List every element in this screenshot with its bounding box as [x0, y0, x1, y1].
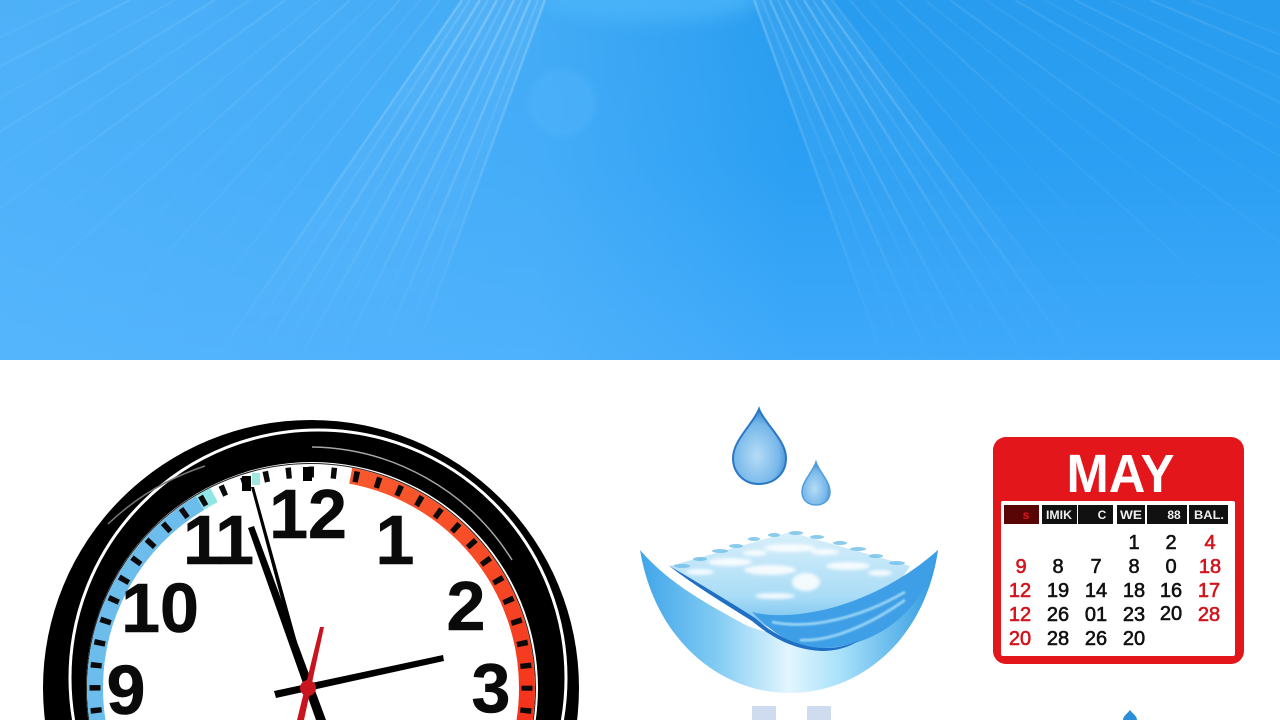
sky banner background [0, 0, 1280, 360]
date grid: 18 [1199, 556, 1221, 578]
clock numerals: 12 [269, 475, 347, 553]
clock numerals: 1 [376, 501, 414, 579]
water drop small [802, 462, 830, 505]
bowl body [640, 550, 938, 693]
deep water wave [752, 550, 938, 648]
weekday header: WE [1120, 508, 1142, 522]
clock numerals: 2 [447, 567, 485, 645]
weekday header: IMIK [1046, 508, 1072, 522]
date grid: 20 [1123, 628, 1145, 650]
clock [43, 420, 579, 720]
date grid: 14 [1085, 580, 1107, 602]
clock minute band [86, 464, 536, 720]
date grid: 9 [1015, 556, 1027, 578]
date grid: 20 [1009, 628, 1031, 650]
weekday header: s [1023, 508, 1030, 522]
month title: MAY [1066, 444, 1174, 504]
date grid: 26 [1047, 604, 1069, 626]
small bottom water drop [1123, 710, 1137, 720]
date grid: 12 [1009, 604, 1031, 626]
water surface [670, 532, 910, 640]
date grid: 0 [1165, 556, 1177, 578]
weekday header [1004, 505, 1228, 524]
weekday header: 88 [1167, 508, 1181, 522]
water bowl [640, 531, 938, 693]
surface bubbles [674, 531, 905, 568]
date grid [1009, 532, 1221, 650]
clock outer rim [43, 420, 579, 720]
calendar [993, 437, 1244, 664]
faint reflection bars [752, 706, 831, 720]
lens flare [528, 69, 596, 137]
date grid: 16 [1160, 580, 1182, 602]
date grid: 01 [1085, 604, 1107, 626]
wave highlight [772, 592, 905, 640]
date grid: 28 [1047, 628, 1069, 650]
light rays left [0, 0, 546, 308]
weekday header: C [1098, 508, 1107, 522]
weekday header: BAL. [1194, 508, 1224, 522]
date grid: 26 [1085, 628, 1107, 650]
date grid: 7 [1090, 556, 1102, 578]
dark shoreline [668, 565, 860, 651]
date grid: 8 [1128, 556, 1140, 578]
calendar card [993, 437, 1244, 664]
date grid: 18 [1123, 580, 1145, 602]
clock numerals: 11 [183, 501, 252, 579]
date grid: 1 [1128, 532, 1140, 554]
clock numerals: 10 [121, 569, 199, 647]
date grid: 2 [1165, 532, 1177, 554]
light rays right [753, 0, 1280, 310]
date grid: 28 [1198, 604, 1220, 626]
date grid: 4 [1204, 532, 1216, 554]
date grid: 19 [1047, 580, 1069, 602]
date grid: 8 [1052, 556, 1064, 578]
date grid: 20 [1160, 603, 1182, 625]
date grid: 12 [1009, 580, 1031, 602]
surface ripples [686, 544, 892, 599]
date grid: 23 [1123, 604, 1145, 626]
clock hands [248, 487, 444, 720]
clock numerals [107, 475, 510, 720]
date grid: 17 [1198, 580, 1220, 602]
water drop large [733, 409, 786, 484]
